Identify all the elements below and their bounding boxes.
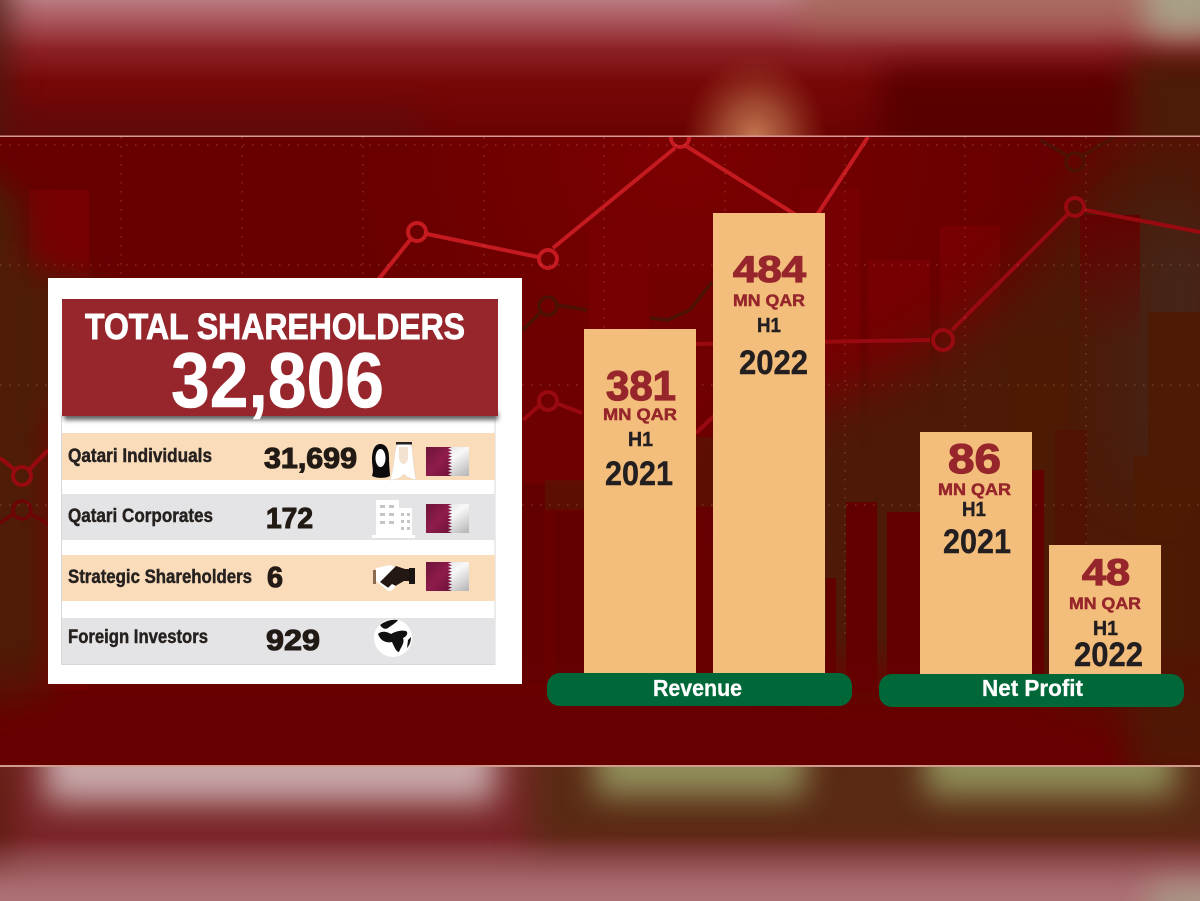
brown haze grey corner <box>1130 220 1200 480</box>
icon: handshake <box>373 565 415 591</box>
label pill: revenue <box>547 673 852 706</box>
bar: revenue H1 2021: H1 <box>628 429 653 451</box>
bar: net profit H1 2021: H1 <box>962 499 986 521</box>
label: Foreign Investors <box>68 627 208 648</box>
background: blurred bottom band <box>0 767 1200 901</box>
row: Foreign Investors <box>62 618 495 664</box>
bar: revenue H1 2021: 2021 <box>605 455 673 493</box>
table frame <box>62 416 495 664</box>
total figure: 32,806 <box>171 336 384 424</box>
bar: net profit H1 2022: 48 <box>1082 552 1130 593</box>
row: Strategic Shareholders <box>62 555 495 601</box>
icon: Qatar flag <box>426 447 469 476</box>
icon: Qatar flag <box>426 562 469 591</box>
chart line: lower red <box>0 198 1200 485</box>
label: Qatari Individuals <box>68 446 212 467</box>
label: Strategic Shareholders <box>68 567 252 588</box>
brown haze left <box>0 172 93 706</box>
value: 172 <box>266 503 313 535</box>
background: main chart panel <box>0 120 1200 800</box>
bar: net profit H1 2021: MN QAR <box>938 480 1011 499</box>
bar: net profit H1 2022: 2022 <box>1074 636 1143 674</box>
band divider bottom <box>0 765 1200 767</box>
row: Qatari Corporates <box>62 494 495 540</box>
chart line: bright red <box>377 137 870 278</box>
background: blurred top band <box>0 0 1200 136</box>
heading: total shareholders: TOTAL SHAREHOLDERS <box>85 306 465 347</box>
header shadow <box>64 412 498 420</box>
value: 31,699 <box>264 443 357 475</box>
bar: net profit H1 2022: H1 <box>1093 618 1118 640</box>
bar: revenue H1 2022: 484 <box>733 249 806 290</box>
label pill: net profit <box>879 674 1184 707</box>
header banner <box>62 299 498 424</box>
brown haze right <box>825 137 1200 712</box>
label pill: revenue: Revenue <box>653 675 742 701</box>
bar: revenue H1 2021 <box>584 329 696 674</box>
bar: net profit H1 2021: 86 <box>948 435 1001 482</box>
bar: revenue H1 2021: 381 <box>606 362 676 409</box>
bar: revenue H1 2022: H1 <box>757 315 781 337</box>
icon: office buildings <box>372 500 415 538</box>
label: Qatari Corporates <box>68 506 213 527</box>
panel: total shareholders card <box>48 278 522 684</box>
value: 929 <box>266 625 320 657</box>
row: Qatari Individuals <box>62 433 495 480</box>
card background <box>48 278 522 684</box>
bar: net profit H1 2022: MN QAR <box>1069 594 1141 613</box>
icon: Qatar flag <box>426 504 469 533</box>
chart line: dark shadow <box>523 137 1115 330</box>
brown haze bottom corner <box>1126 699 1200 765</box>
chart line: dark red lower left <box>0 501 48 524</box>
bar: net profit H1 2021: 2021 <box>943 523 1011 561</box>
bar: revenue H1 2022: MN QAR <box>733 291 805 310</box>
chart: net profit bars <box>879 432 1184 707</box>
bar: net profit H1 2021 <box>920 432 1032 675</box>
band divider top <box>0 136 1200 137</box>
value: 6 <box>267 562 283 594</box>
icon: man and woman <box>372 442 416 480</box>
icon: globe <box>374 619 412 657</box>
bar: net profit H1 2022 <box>1049 545 1161 675</box>
label pill: net profit: Net Profit <box>982 675 1083 701</box>
bar: revenue H1 2021: MN QAR <box>603 405 677 424</box>
chart: revenue bars <box>547 213 852 706</box>
bar: revenue H1 2022: 2022 <box>739 344 808 382</box>
bar: revenue H1 2022 <box>713 213 825 674</box>
